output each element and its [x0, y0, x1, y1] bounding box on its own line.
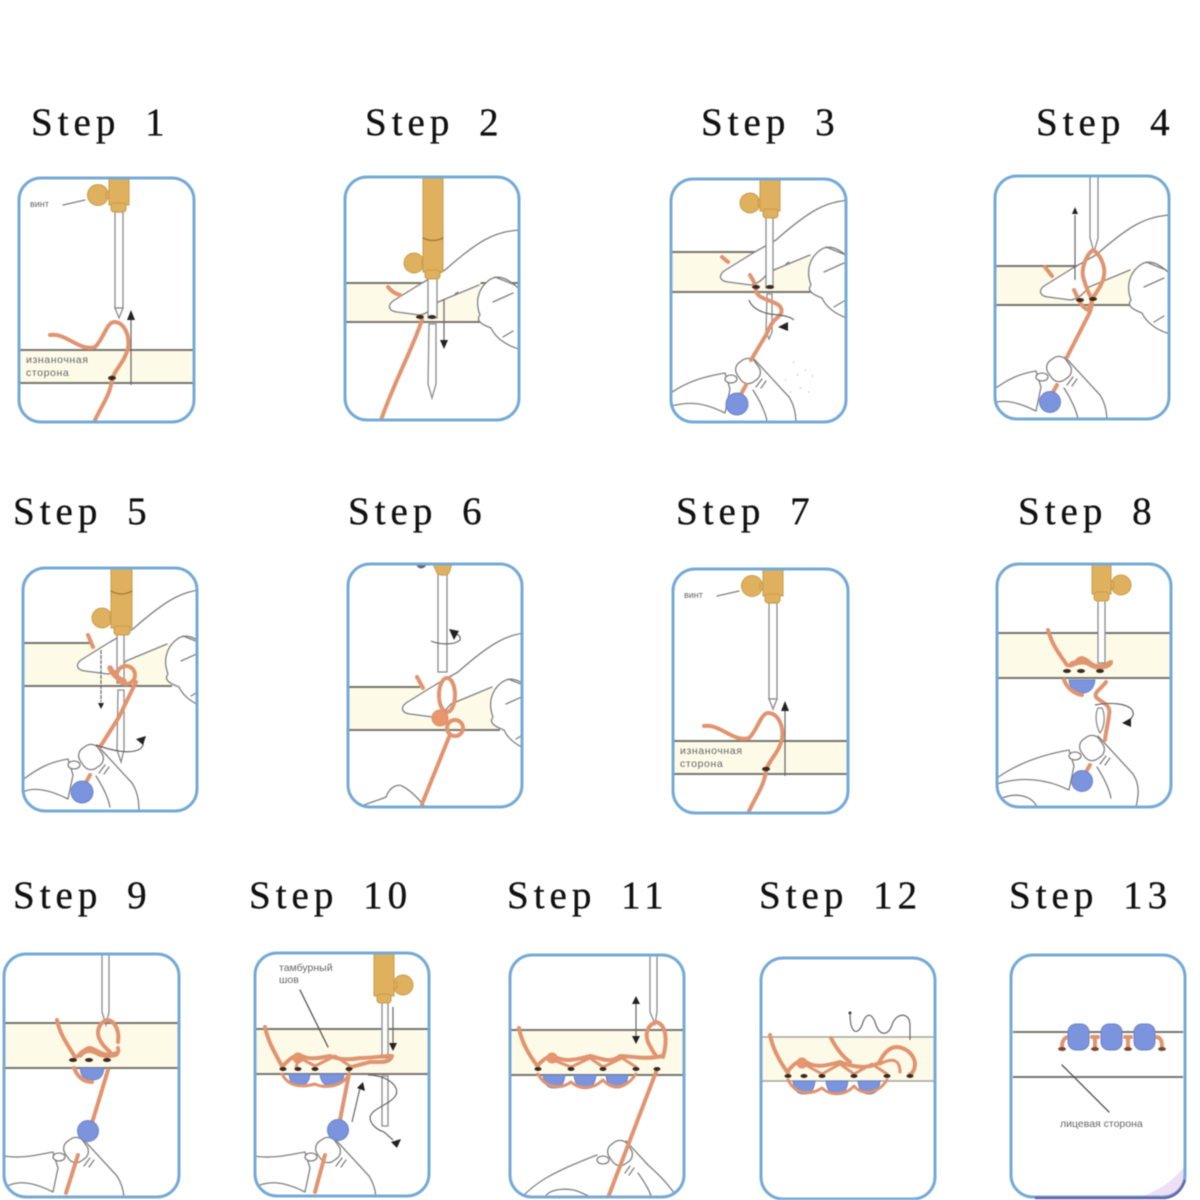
needle tool with screw	[742, 569, 783, 709]
knots	[784, 1074, 914, 1078]
frame	[761, 958, 935, 1199]
bead	[78, 1120, 98, 1142]
thread	[704, 713, 782, 811]
hand	[253, 1134, 376, 1200]
half beads	[543, 1075, 628, 1088]
heading: Step 4: Step 4	[1036, 101, 1175, 144]
label: chain stitch: тамбурный	[279, 962, 333, 974]
bead	[328, 1120, 348, 1140]
thread	[1048, 630, 1111, 740]
knots	[69, 1058, 111, 1062]
needle	[102, 954, 109, 1025]
corner smudge	[1140, 1165, 1185, 1197]
heading: Step 8: Step 8	[1018, 490, 1157, 533]
frame	[997, 564, 1171, 807]
frame	[1011, 955, 1185, 1197]
hand holding bead	[21, 741, 139, 812]
hand holding bead	[997, 732, 1138, 807]
heading: Step 1: Step 1	[31, 101, 170, 144]
heading: Step 13: Step 13	[1009, 874, 1172, 917]
hand holding bead	[672, 357, 798, 421]
rotation arrow	[431, 629, 460, 644]
heading: Step 11: Step 11	[507, 874, 669, 917]
thread	[1045, 267, 1092, 357]
frame	[23, 568, 197, 811]
heading: Step 2: Step 2	[365, 101, 504, 144]
knots	[752, 285, 774, 289]
small hand at bottom	[362, 785, 425, 807]
needle tool with screw	[92, 568, 132, 762]
label: wrong side: сторона	[680, 758, 723, 770]
heading: Step 3: Step 3	[701, 101, 840, 144]
knots	[1058, 1047, 1166, 1051]
heading: Step 5: Step 5	[13, 490, 152, 533]
thread loop	[1083, 250, 1104, 299]
bead in hand	[1072, 765, 1092, 792]
half beads	[793, 1081, 880, 1094]
thread	[88, 635, 136, 747]
needle tool with screw	[374, 953, 413, 1126]
thread	[57, 1020, 118, 1193]
arrow up	[781, 701, 789, 776]
beads	[1068, 1024, 1155, 1050]
frame	[255, 953, 429, 1196]
frame	[19, 178, 194, 422]
rotation arrow	[96, 736, 146, 752]
knot	[108, 376, 116, 380]
hand holding fabric	[1041, 215, 1170, 334]
heading: Step 9: Step 9	[13, 874, 152, 917]
chain stitch thread	[265, 1027, 392, 1192]
bead	[1040, 385, 1060, 412]
panel: step 1	[19, 178, 194, 422]
arrow up	[1072, 207, 1078, 280]
panel: step 2	[345, 177, 519, 420]
heading: Step 12: Step 12	[759, 874, 922, 917]
half beads	[289, 1074, 344, 1086]
bottom edge shadow	[1035, 1180, 1185, 1198]
panel: step 11	[510, 955, 684, 1199]
arrows	[352, 1007, 401, 1148]
half bead	[80, 1068, 104, 1080]
label: screw	[30, 199, 85, 209]
bead	[726, 385, 748, 415]
half bead	[1069, 680, 1095, 693]
knots	[280, 1067, 352, 1071]
heading: Step 7: Step 7	[676, 490, 815, 533]
stitches	[1062, 1037, 1162, 1047]
label: right side: лицевая сторона	[1060, 1118, 1143, 1130]
rotation arrow	[749, 300, 794, 331]
thread loops	[417, 677, 463, 804]
panel: step 6	[348, 564, 532, 807]
arrow down	[440, 300, 448, 349]
panel: step 5	[21, 568, 207, 812]
panel: step 8	[997, 564, 1171, 807]
label: chain stitch: шов	[279, 974, 299, 986]
thread	[381, 287, 422, 420]
knot	[762, 767, 770, 771]
double arrow	[632, 996, 640, 1044]
heading: Step 6: Step 6	[348, 490, 487, 533]
label: screw: винт	[684, 590, 703, 600]
label: chain stitch	[279, 962, 333, 1047]
speckles	[785, 362, 813, 392]
panel: step 4	[989, 176, 1170, 424]
frame	[348, 564, 522, 807]
frame	[345, 177, 519, 420]
label: wrong side: изнаночная	[680, 745, 743, 757]
panel: step 10	[253, 953, 429, 1200]
hand	[4, 1134, 124, 1200]
hand	[520, 1137, 678, 1199]
wavy stitch path	[848, 1012, 910, 1040]
heading: Step 10: Step 10	[249, 874, 412, 917]
needle tool tip	[416, 564, 452, 672]
hand holding fabric	[76, 590, 196, 704]
panel: step 13	[1011, 955, 1185, 1198]
label: screw	[684, 590, 739, 600]
panel: step 3	[668, 179, 850, 426]
frame	[4, 954, 179, 1197]
arrow up	[127, 310, 135, 385]
label: screw: винт	[30, 199, 49, 209]
frame	[510, 955, 684, 1197]
needle tool with screw	[1092, 564, 1131, 733]
hand holding fabric	[721, 200, 850, 319]
frame	[995, 176, 1169, 419]
knots	[1076, 297, 1097, 302]
frame	[671, 179, 846, 422]
hand holding bead	[996, 355, 1108, 418]
label: wrong side: изнаночная	[26, 354, 89, 366]
hand holding fabric	[390, 230, 519, 349]
leader line	[1062, 1065, 1109, 1112]
label: wrong side: сторона	[26, 367, 69, 379]
knots	[534, 1067, 660, 1071]
needle	[1090, 176, 1098, 252]
thread	[722, 257, 782, 360]
bead	[71, 775, 93, 803]
rotation arrow	[1095, 703, 1133, 727]
dashed arrow down	[98, 650, 104, 709]
hand holding fabric	[403, 632, 532, 751]
thread	[50, 322, 128, 420]
knots	[416, 315, 436, 319]
knots	[1063, 669, 1104, 673]
chain stitch thread	[519, 1022, 666, 1195]
frame	[673, 569, 848, 813]
panel: step 7	[673, 569, 848, 813]
needle tool with screw	[740, 179, 780, 339]
panel: step 9	[4, 954, 179, 1200]
panel: step 12	[761, 958, 935, 1199]
needle	[650, 955, 657, 1024]
needle tool with screw	[404, 177, 443, 398]
needle tool with screw	[88, 178, 129, 318]
chain stitch thread	[770, 1035, 915, 1094]
